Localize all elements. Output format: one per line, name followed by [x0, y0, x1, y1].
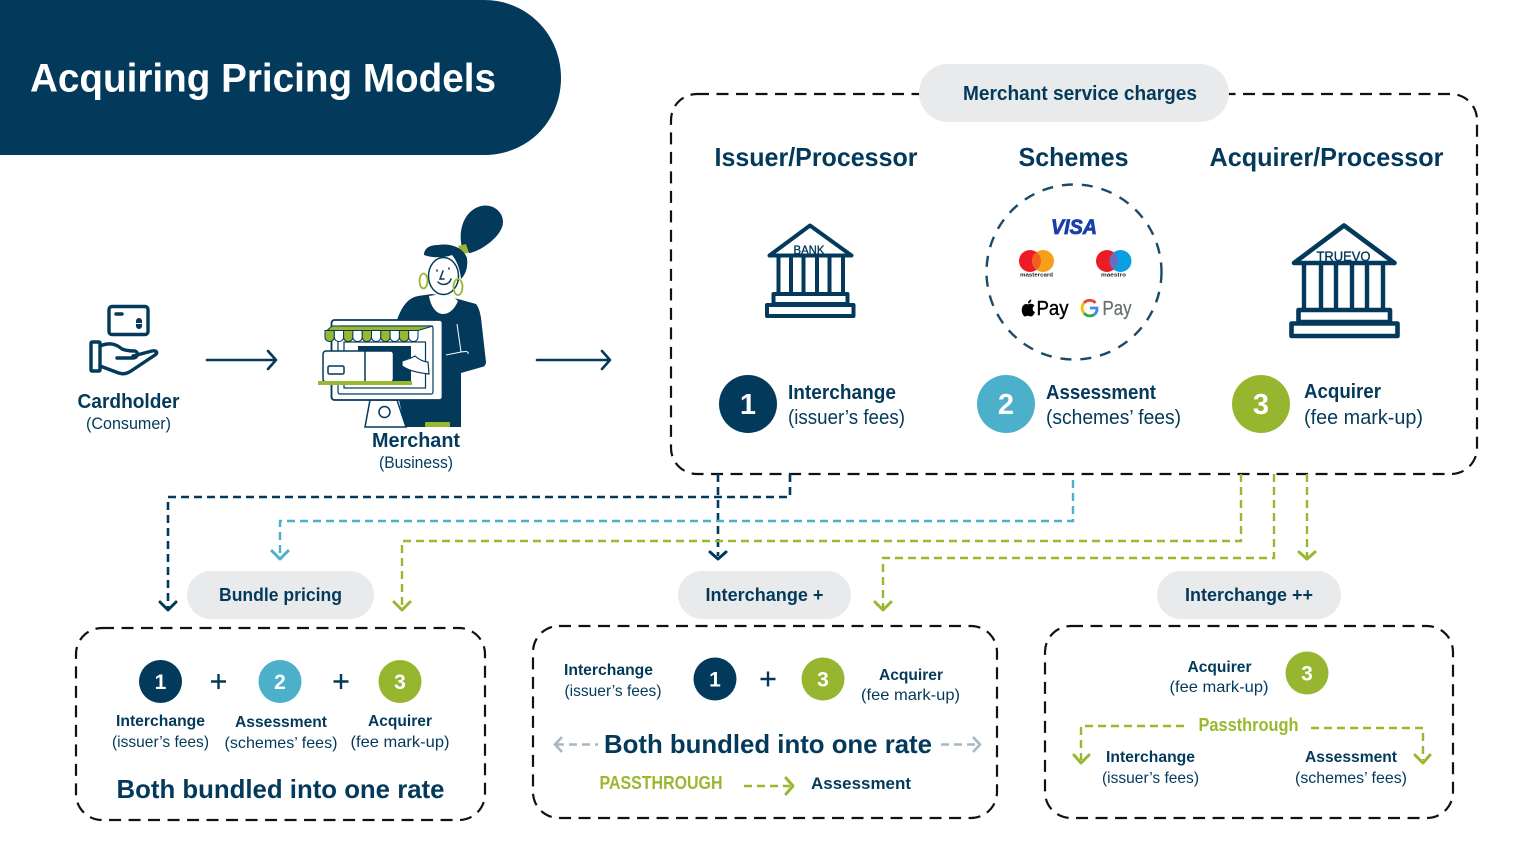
passthrough label: Passthrough [1198, 715, 1298, 735]
logo: visa: VISA [1051, 216, 1097, 239]
connector: acquirer to interchange plus plus [1299, 474, 1315, 559]
merchant label [372, 430, 460, 472]
badge 1 [139, 660, 182, 703]
label: acquirer: Acquirer [1188, 659, 1252, 676]
label: interchange [1102, 749, 1199, 787]
pill: interchange plus [678, 571, 851, 619]
fee 1: interchange: 1 [740, 389, 756, 421]
label: assessment: Assessment [235, 714, 328, 731]
panel: bundle pricing [76, 628, 485, 820]
cardholder label: Cardholder [78, 391, 180, 413]
arrow: passthrough left [1074, 726, 1184, 763]
connector: interchange to interchange plus [710, 474, 726, 559]
label: interchange: Interchange [1106, 749, 1195, 766]
cardholder icon: card over hand [91, 306, 157, 374]
fee 2: assessment: (schemes’ fees) [1046, 407, 1181, 429]
plus sign [334, 674, 348, 689]
pill: interchange plus plus [1157, 571, 1341, 619]
fee 1: interchange: Interchange [788, 382, 896, 404]
pill: interchange plus plus: Interchange ++ [1185, 584, 1313, 605]
pill: bundle pricing: Bundle pricing [219, 584, 342, 605]
logo: maestro: maestro [1101, 272, 1126, 278]
icon: truevo bank building: TRUEVO [1316, 248, 1371, 264]
badge 1 [694, 658, 736, 700]
circle of payment scheme logos [986, 184, 1162, 360]
logo: maestro [1096, 250, 1132, 278]
label: assessment: Assessment [1305, 749, 1398, 766]
title banner [0, 0, 561, 155]
cardholder label: (Consumer) [86, 415, 171, 433]
bundled rate statement: Both bundled into one rate [604, 729, 932, 759]
label: assessment [1295, 749, 1407, 787]
fee 2: assessment: Assessment [1046, 382, 1156, 404]
label: interchange [112, 713, 209, 751]
label: assessment [224, 714, 338, 752]
heading: issuer/processor: Issuer/Processor [714, 142, 918, 172]
logo: apple pay: Pay [1036, 298, 1068, 320]
label: interchange [564, 662, 662, 700]
merchant label: Merchant [372, 430, 460, 452]
pill: interchange plus: Interchange + [706, 584, 824, 605]
title banner: Acquiring Pricing Models [30, 56, 496, 100]
label: acquirer [1170, 659, 1268, 696]
badge 2: 2 [274, 671, 286, 694]
cardholder label [78, 391, 180, 433]
pill: bundle pricing [187, 571, 374, 619]
icon: bank building [767, 226, 854, 316]
badge 3: 3 [394, 671, 406, 694]
heading pill: merchant service charges: Merchant service charges [963, 83, 1197, 105]
label: interchange: (issuer’s fees) [564, 683, 662, 700]
fee 3: acquirer [1232, 375, 1423, 433]
connector: interchange to bundle pricing [160, 474, 790, 610]
icon: truevo bank building [1292, 226, 1398, 336]
label: acquirer [350, 713, 450, 751]
arrow: passthrough right [1311, 728, 1430, 763]
label: assessment: (schemes’ fees) [224, 735, 338, 752]
merchant illustration [318, 205, 503, 427]
arrow: cardholder to merchant [207, 351, 276, 369]
panel: merchant service charges [671, 64, 1477, 474]
label: assessment: Assessment [811, 774, 911, 793]
fee 3: acquirer: Acquirer [1304, 381, 1381, 403]
plus sign [760, 672, 776, 686]
arrow: passthrough [744, 778, 793, 794]
fee 3: acquirer: (fee mark-up) [1304, 407, 1423, 429]
arrow: bundled left [555, 737, 598, 752]
panel: interchange plus [533, 626, 997, 818]
heading: schemes: Schemes [1018, 142, 1128, 172]
label: acquirer: Acquirer [879, 667, 943, 684]
passthrough label: PASSTHROUGH [600, 773, 722, 793]
plus sign [211, 674, 226, 689]
arrow: bundled right [941, 737, 980, 752]
label: interchange: (issuer’s fees) [1102, 770, 1199, 787]
icon: bank building: BANK [794, 243, 824, 257]
badge 1: 1 [709, 668, 721, 692]
logo: mastercard: mastercard [1020, 272, 1053, 278]
heading pill: merchant service charges [919, 64, 1229, 122]
connector: acquirer to bundle pricing [394, 474, 1241, 610]
badge 2 [258, 660, 302, 703]
badge 3 [802, 658, 844, 700]
badge 1: 1 [155, 671, 167, 694]
bundled rate statement: Both bundled into one rate [116, 774, 444, 804]
label: interchange: Interchange [116, 713, 205, 730]
badge 3: 3 [817, 668, 829, 692]
panel: interchange plus plus [1045, 626, 1453, 818]
logo: mastercard [1019, 250, 1054, 278]
label: assessment: (schemes’ fees) [1295, 770, 1407, 787]
label: acquirer: (fee mark-up) [861, 687, 960, 704]
label: acquirer: (fee mark-up) [350, 734, 450, 751]
fee 1: interchange [719, 375, 905, 433]
heading: acquirer/processor: Acquirer/Processor [1210, 142, 1444, 172]
label: interchange: (issuer’s fees) [112, 734, 209, 751]
logo: google pay [1082, 298, 1132, 320]
label: acquirer [861, 667, 960, 704]
badge 3 [378, 660, 422, 703]
logo: apple pay [1022, 298, 1068, 320]
badge 3 [1286, 652, 1328, 694]
fee 2: assessment [977, 375, 1181, 433]
label: interchange: Interchange [564, 662, 653, 679]
connector: assessment to bundle pricing [272, 480, 1073, 559]
fee 2: assessment: 2 [998, 389, 1014, 421]
connector: acquirer to interchange plus [875, 474, 1274, 610]
fee 1: interchange: (issuer’s fees) [788, 407, 905, 429]
label: acquirer: Acquirer [368, 713, 432, 730]
fee 3: acquirer: 3 [1253, 389, 1269, 421]
label: acquirer: (fee mark-up) [1170, 679, 1268, 696]
merchant label: (Business) [379, 454, 453, 472]
badge 3: 3 [1301, 662, 1313, 686]
arrow: merchant to service charges [537, 351, 610, 369]
logo: google pay: Pay [1102, 298, 1132, 320]
